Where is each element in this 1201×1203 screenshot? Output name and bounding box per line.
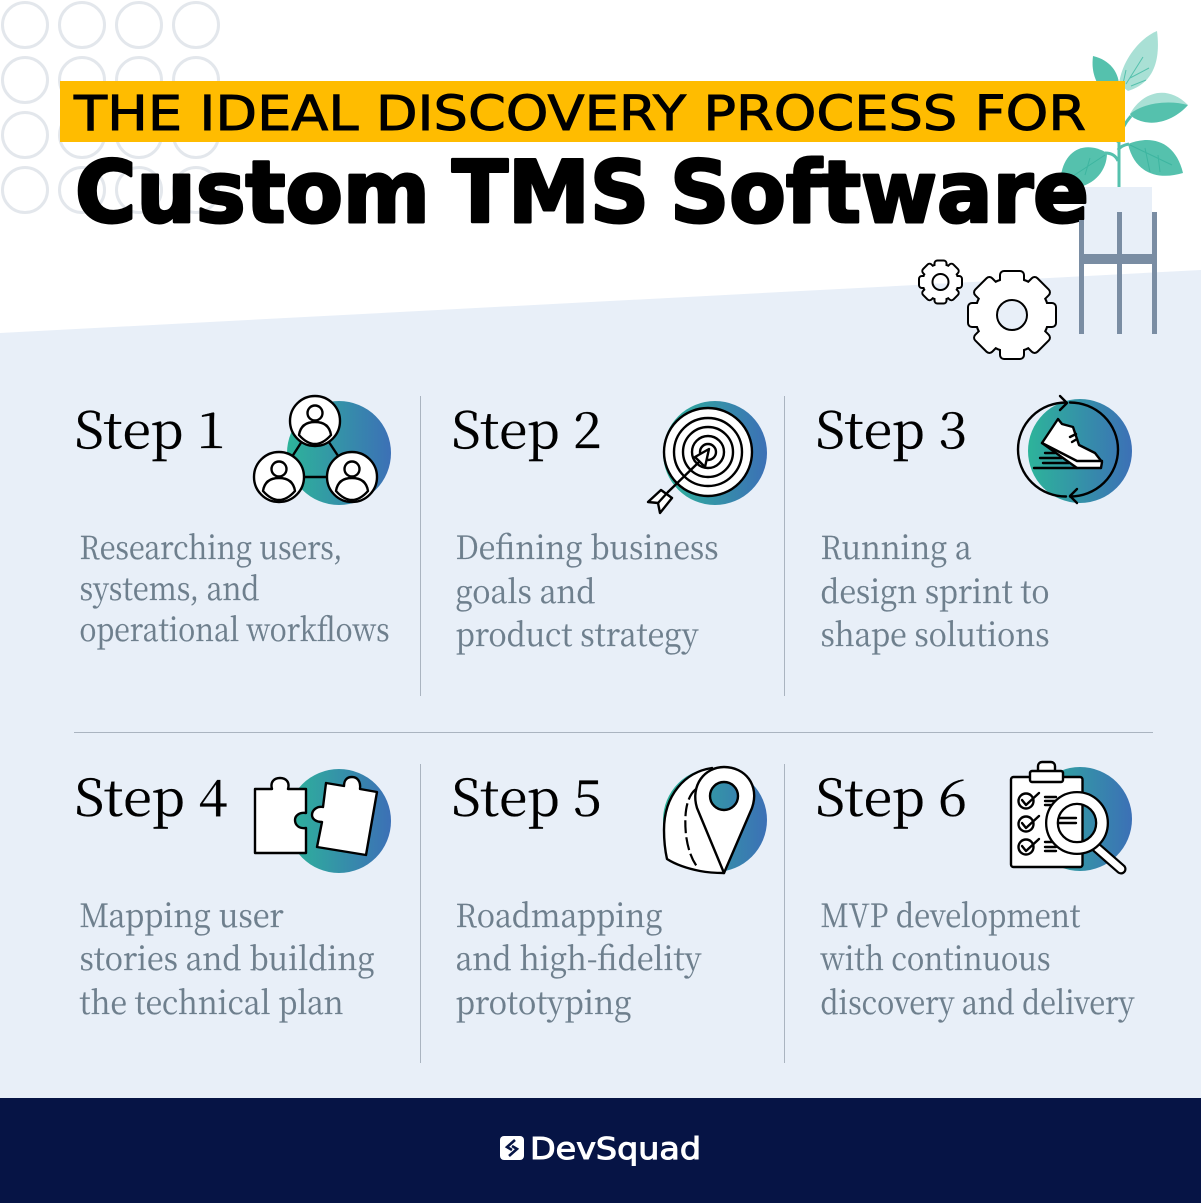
step 3 heading: Step 3	[816, 391, 967, 463]
step 4 description: Mapping user	[80, 891, 284, 937]
pot	[1083, 187, 1152, 257]
step 3 description: design sprint to	[820, 567, 1050, 613]
background: light blue slanted panel	[0, 270, 1201, 1098]
title line 2: Software	[670, 143, 1089, 243]
icon: clipboard checklist with magnifier	[1011, 762, 1132, 871]
step 3 description	[820, 523, 1050, 656]
title line 2	[75, 143, 1089, 243]
panel: step 6	[816, 758, 1135, 1024]
step 5 description: prototyping	[456, 978, 632, 1024]
plant stand	[1079, 212, 1157, 334]
step 6 description: MVP development	[820, 891, 1081, 937]
icon: puzzle pieces	[255, 769, 391, 873]
step 4 description: the technical plan	[80, 978, 344, 1024]
step 4 description	[80, 891, 374, 1024]
footer logo: DevSquad: DevSquad	[530, 1132, 701, 1167]
decorative circle grid	[2, 2, 218, 212]
title line 2: Custom	[75, 143, 430, 243]
step 2 heading: Step 2	[452, 391, 602, 463]
step 6 description	[820, 891, 1135, 1024]
panel: step 3	[816, 391, 1132, 656]
step 6 heading: Step 6	[816, 758, 967, 830]
step 3 description: shape solutions	[820, 610, 1050, 656]
step 2 description: Defining business	[456, 523, 718, 569]
icon: connected users	[254, 396, 391, 505]
step 1 description: systems, and	[80, 564, 260, 610]
step 6 description: discovery and delivery	[820, 978, 1135, 1024]
step 3 description: Running a	[820, 523, 972, 569]
step 1 description: Researching users,	[80, 523, 342, 569]
icon: small gear	[920, 262, 961, 302]
panel: step 1	[74, 391, 391, 651]
icon: target with arrow	[648, 401, 767, 513]
panel: step 4	[74, 758, 391, 1024]
panel: step 2	[452, 391, 767, 656]
step 1 description: operational workflows	[80, 605, 390, 651]
icon: map pin on folded map	[663, 767, 767, 873]
title line 2: TMS	[452, 143, 649, 243]
column and row dividers	[74, 396, 1153, 1063]
icon: large gear	[969, 272, 1055, 358]
step 2 description: goals and	[456, 567, 596, 613]
step 5 description: Roadmapping	[456, 891, 662, 937]
title line 1: THE IDEAL DISCOVERY PROCESS FOR	[73, 86, 1086, 142]
step 1 description	[80, 523, 390, 651]
step 2 description: product strategy	[456, 610, 699, 656]
step 4 heading: Step 4	[74, 758, 228, 830]
plant illustration with pot and stand	[1061, 31, 1188, 257]
title highlight bar	[60, 81, 1125, 142]
step 5 heading: Step 5	[452, 758, 602, 830]
footer band	[0, 1098, 1201, 1203]
step 5 description	[456, 891, 702, 1024]
step 4 description: stories and building	[80, 934, 374, 980]
step 6 description: with continuous	[820, 934, 1050, 980]
icon: running shoe with cycle arrows	[1018, 396, 1132, 503]
step 5 description: and high-fidelity	[456, 934, 702, 980]
step 1 heading: Step 1	[74, 391, 226, 463]
panel: step 5	[452, 758, 767, 1024]
step 2 description	[456, 523, 718, 656]
